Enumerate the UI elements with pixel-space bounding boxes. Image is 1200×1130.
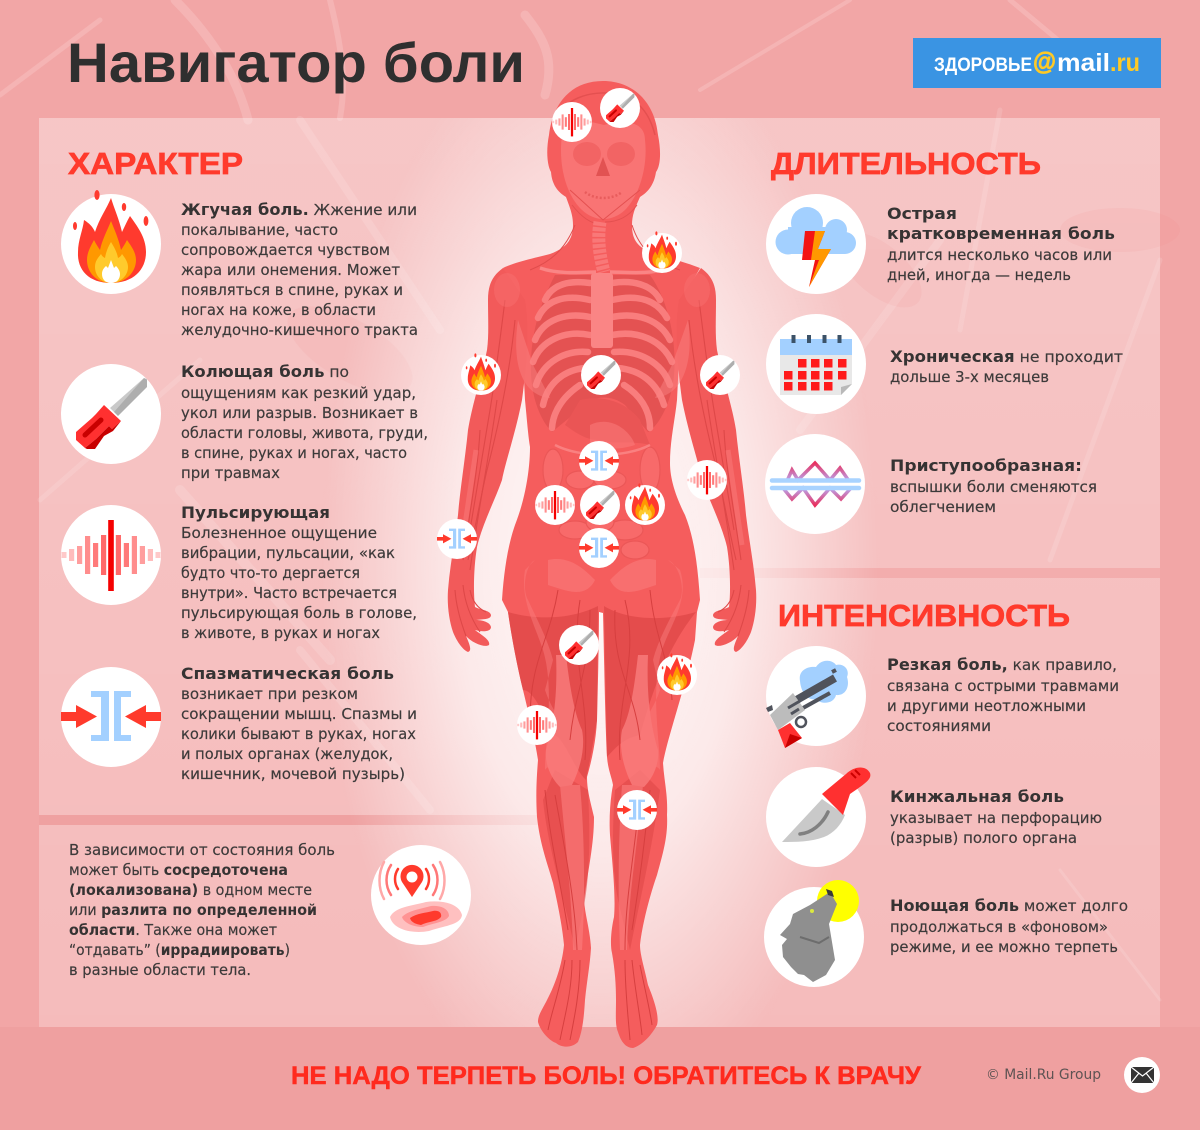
item: paroxysmal: Приступообразная: [890,457,1082,475]
skeleton: rib cage [516,268,690,432]
heading: ИНТЕНСИВНОСТЬ: ИНТЕНСИВНОСТЬ [778,598,1070,633]
item: throbbing pain: в животе, в руках и ногах [181,625,380,642]
body anatomy figure [448,81,756,1048]
item: chronic: дольше 3-х месяцев [890,369,1049,386]
logo: здоровье mail.ru [913,38,1161,88]
item: throbbing pain: Пульсирующая [181,504,330,522]
item: paroxysmal: вспышки боли сменяются [890,479,1097,496]
icon: location [371,845,471,945]
item: burning pain: покалывание, часто [181,222,338,239]
item: spasmodic pain: колики бывают в руках, ногах [181,726,416,743]
item: burning pain: появляться в спине, руках и [181,282,403,299]
item: acute short-term: дней, иногда — недель [887,267,1071,284]
item: throbbing pain: Болезненное ощущение [181,525,377,542]
item: aching pain: режиме, и ее можно терпеть [890,939,1118,956]
heading: ДЛИТЕЛЬНОСТЬ: ДЛИТЕЛЬНОСТЬ [771,146,1041,181]
panel backdrop [39,110,1180,1027]
panel: duration [765,146,1123,534]
panel: localisation note: области. Также она может [69,922,277,939]
item: stabbing pain: ощущениям как резкий удар, [181,385,416,402]
heading: ХАРАКТЕР: ХАРАКТЕР [68,146,243,181]
panel: localisation note: может быть сосредоточена [69,862,288,879]
item: throbbing pain [61,504,417,642]
item: spasmodic pain [61,665,417,783]
logo: здоровье mail.ru: ЗДОРОВЬЕ [934,55,1032,76]
item: acute short-term: кратковременная боль [887,225,1115,243]
item: spasmodic pain: Спазматическая боль [181,665,394,683]
item: stabbing pain: в спине, руках и ногах, часто [181,445,407,462]
item: sharp pain: состояниями [887,718,991,735]
item: dagger pain: Кинжальная боль [890,788,1064,806]
item: chronic: Хроническая не проходит [890,348,1123,366]
item: aching pain [764,880,1128,987]
item: burning pain: ногах на коже, в области [181,302,376,319]
panel: localisation note: В зависимости от состояния боль [69,842,335,859]
item: spasmodic pain: кишечник, мочевой пузырь) [181,766,405,783]
organs: stomach and intestines [543,398,660,559]
item: aching pain: продолжаться в «фоновом» [890,919,1108,936]
pain point markers [437,88,740,830]
item: burning pain: жара или онемения. Может [181,262,400,279]
item: dagger pain: (разрыв) полого органа [890,830,1077,847]
item: throbbing pain: пульсирующая боль в голове, [181,605,417,622]
panel: localisation note: в разные области тела. [69,962,251,979]
panel: localisation note [69,842,471,979]
item: dagger pain: указывает на перфорацию [890,810,1102,827]
item: sharp pain: связана с острыми травмами [887,678,1119,695]
panel: localisation note: или разлита по определенной [69,902,317,919]
panel: intensity [764,598,1128,987]
item: aching pain: Ноющая боль может долго [890,897,1128,915]
item: paroxysmal: облегчением [890,499,996,516]
item: stabbing pain: области головы, живота, груди, [181,425,428,442]
item: acute short-term [766,194,1115,294]
logo: здоровье mail.ru: mail [1057,49,1110,77]
item: burning pain: желудочно-кишечного тракта [181,322,418,339]
item: chronic [766,314,1123,414]
item: throbbing pain: будто что-то дергается [181,565,360,582]
item: paroxysmal [765,434,1097,534]
pelvis and leg bones [524,559,683,950]
item: burning pain: Жгучая боль. Жжение или [181,201,417,219]
copyright: © Mail.Ru Group [986,1067,1101,1083]
thighs dark shading [508,606,696,950]
item: spasmodic pain: и полых органах (желудок, [181,746,393,763]
item: sharp pain: Резкая боль, как правило, [887,656,1117,674]
item: sharp pain: и другими неотложными [887,698,1086,715]
item: spasmodic pain: возникает при резком [181,686,358,703]
logo: здоровье mail.ru: @ [1033,48,1056,76]
item: throbbing pain: внутри». Часто встречается [181,585,397,602]
item: throbbing pain: вибрации, пульсации, «как [181,545,395,562]
item: burning pain: сопровождается чувством [181,242,390,259]
icon: envelope [1124,1057,1160,1093]
footer call to action: НЕ НАДО ТЕРПЕТЬ БОЛЬ! ОБРАТИТЕСЬ К ВРАЧУ [291,1062,921,1090]
item: burning pain [61,190,418,339]
item: acute short-term: длится несколько часов или [887,247,1112,264]
item: stabbing pain [61,363,428,482]
panel: localisation note: “отдавать” (иррадиировать) [69,942,290,959]
item: acute short-term: Острая [887,205,957,223]
item: dagger pain [766,767,1102,867]
title: Навигатор боли [67,31,525,94]
logo: здоровье mail.ru: .ru [1110,49,1140,77]
item: stabbing pain: при травмах [181,465,280,482]
veins [530,590,672,1040]
item: sharp pain [766,646,1119,748]
item: spasmodic pain: сокращении мышц. Спазмы и [181,706,417,723]
skeleton: skull [530,93,680,272]
item: stabbing pain: укол или разрыв. Возникает в [181,405,418,422]
item: stabbing pain: Колющая боль по [181,363,349,381]
panel: character [61,146,428,783]
panel: localisation note: (локализована) в одном месте [69,882,312,899]
